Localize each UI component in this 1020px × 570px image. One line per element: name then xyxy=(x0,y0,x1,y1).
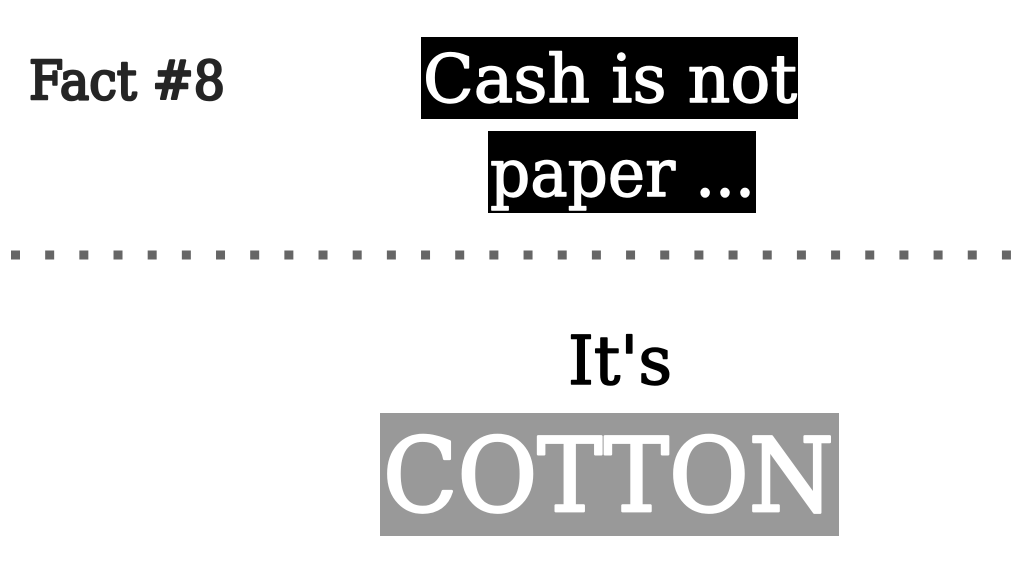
heading: paper ...: paper ... xyxy=(490,135,755,212)
highlighted word: COTTON: COTTON xyxy=(383,417,834,536)
label: Fact #8: Fact #8 xyxy=(29,51,225,112)
text: It's: It's xyxy=(568,322,672,400)
heading: Cash is not: Cash is not xyxy=(423,41,797,118)
dotted divider xyxy=(11,250,1020,260)
